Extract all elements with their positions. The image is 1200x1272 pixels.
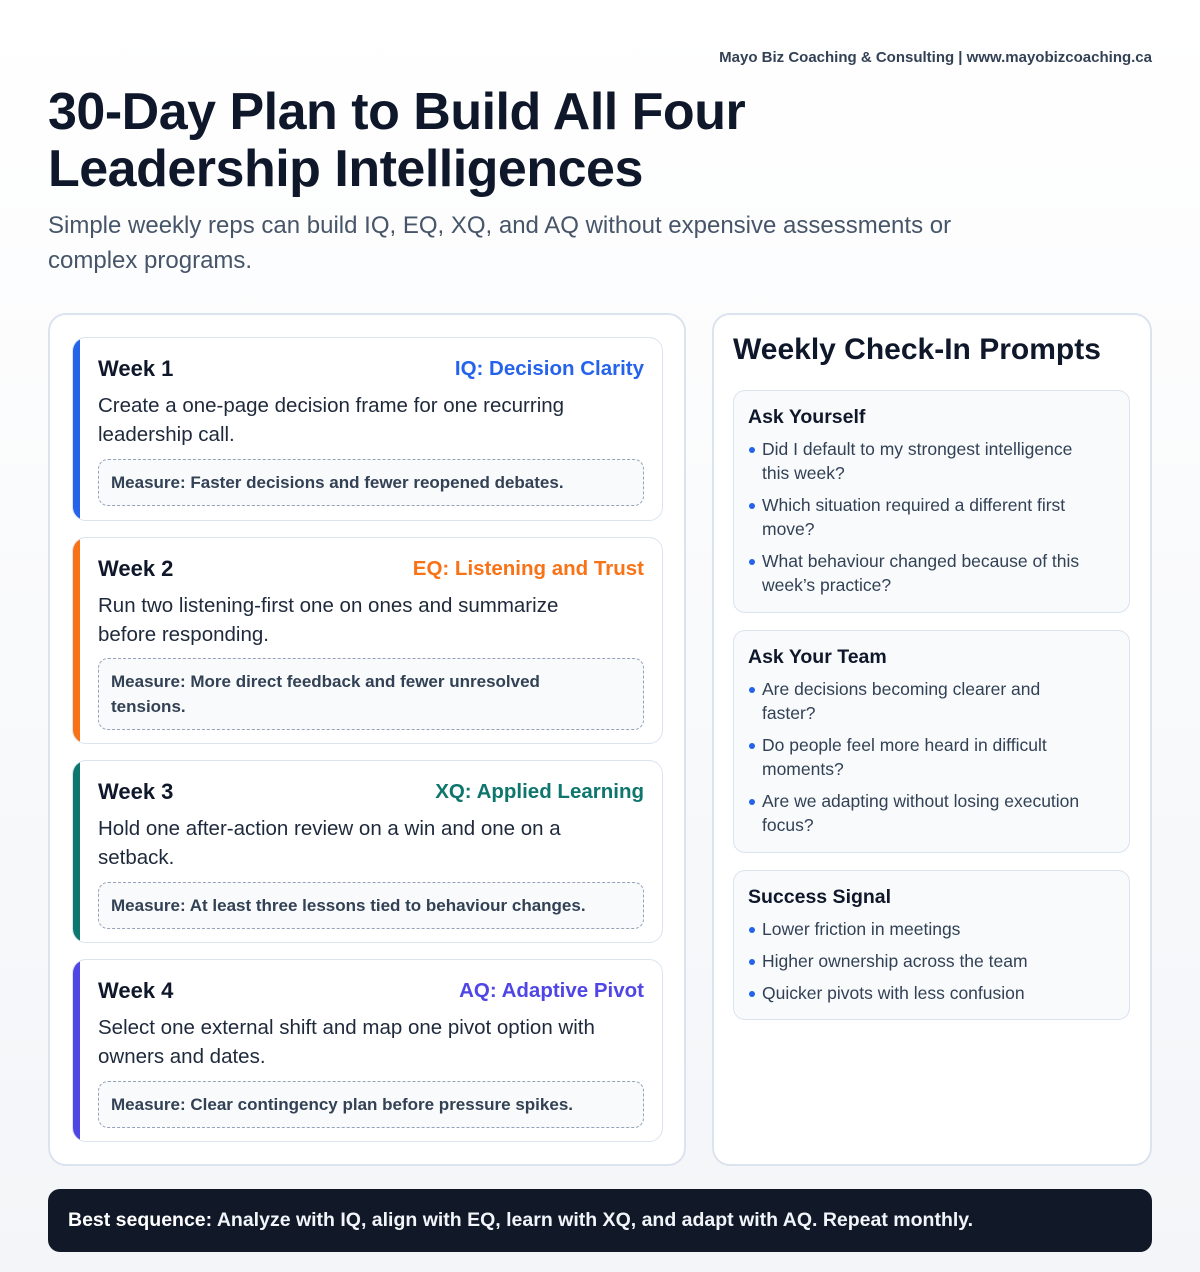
title: [48, 83, 745, 198]
subtitle: Simple weekly reps can build IQ, EQ, XQ, and AQ without expensive assessments or: [48, 212, 951, 239]
subtitle: [48, 212, 951, 274]
card: week 2: Measure: More direct feedback and fewer unresolved: [111, 672, 540, 691]
box: ask yourself: move?: [762, 519, 815, 539]
card: week 3: setback.: [98, 846, 174, 869]
box: success signal: Quicker pivots with less confusion: [762, 983, 1025, 1003]
box: ask your team: Ask Your Team: [748, 646, 887, 668]
box: ask your team: Are decisions becoming clearer and: [762, 679, 1040, 699]
card: week 2: EQ: Listening and Trust: [413, 557, 644, 580]
card: week 4: owners and dates.: [98, 1045, 266, 1068]
card: week 2: tensions.: [111, 697, 186, 716]
card: week 2: before responding.: [98, 623, 269, 646]
box: success signal: [733, 870, 1130, 1020]
card: week 1: Measure: Faster decisions and fewer reopened debates.: [111, 473, 564, 492]
card: week 1: IQ: Decision Clarity: [455, 357, 644, 380]
card: week 1: leadership call.: [98, 423, 235, 446]
box: success signal: Lower friction in meetings: [762, 919, 960, 939]
footer banner: [48, 1189, 1152, 1252]
box: ask your team: Are we adapting without losing execution: [762, 791, 1079, 811]
box: ask your team: Do people feel more heard in difficult: [762, 735, 1047, 755]
brand line: Mayo Biz Coaching & Consulting | www.mayobizcoaching.ca: [719, 49, 1152, 66]
card: week 3: XQ: Applied Learning: [435, 780, 644, 803]
title: 30-Day Plan to Build All Four: [48, 83, 745, 141]
card: week 3: Week 3: [98, 779, 173, 804]
panel: check-in prompts: [712, 313, 1152, 1166]
card: week 2: Week 2: [98, 556, 173, 581]
box: ask your team: moments?: [762, 759, 844, 779]
box: success signal: Success Signal: [748, 886, 891, 908]
box: ask yourself: Which situation required a different first: [762, 495, 1065, 515]
box: ask yourself: Did I default to my strongest intelligence: [762, 439, 1072, 459]
box: ask yourself: What behaviour changed because of this: [762, 551, 1079, 571]
card: week 4: AQ: Adaptive Pivot: [459, 979, 644, 1002]
card: week 4: Select one external shift and map one pivot option with: [98, 1016, 595, 1039]
box: ask yourself: this week?: [762, 463, 845, 483]
panel: weekly plan: [48, 313, 686, 1166]
box: ask your team: focus?: [762, 815, 814, 835]
card: week 3: [72, 760, 663, 943]
card: week 3: Hold one after-action review on a win and one on a: [98, 817, 561, 840]
card: week 1: [72, 337, 663, 521]
card: week 2: [72, 537, 663, 744]
card: week 1: Create a one-page decision frame for one recurring: [98, 394, 564, 417]
footer banner: Best sequence: Analyze with IQ, align with EQ, learn with XQ, and adapt with AQ. Repeat monthly.: [68, 1209, 973, 1231]
box: ask yourself: week’s practice?: [762, 575, 891, 595]
card: week 3: Measure: At least three lessons tied to behaviour changes.: [111, 896, 586, 915]
card: week 4: Week 4: [98, 978, 173, 1003]
box: ask your team: [733, 630, 1130, 853]
box: ask your team: faster?: [762, 703, 816, 723]
prompts heading: Weekly Check-In Prompts: [733, 333, 1101, 366]
box: ask yourself: Ask Yourself: [748, 406, 865, 428]
card: week 2: Run two listening-first one on ones and summarize: [98, 594, 558, 617]
box: ask yourself: [733, 390, 1130, 613]
subtitle: complex programs.: [48, 247, 252, 274]
title: Leadership Intelligences: [48, 140, 643, 198]
card: week 4: [72, 959, 663, 1142]
card: week 1: Week 1: [98, 356, 173, 381]
box: success signal: Higher ownership across the team: [762, 951, 1028, 971]
card: week 4: Measure: Clear contingency plan before pressure spikes.: [111, 1095, 573, 1114]
